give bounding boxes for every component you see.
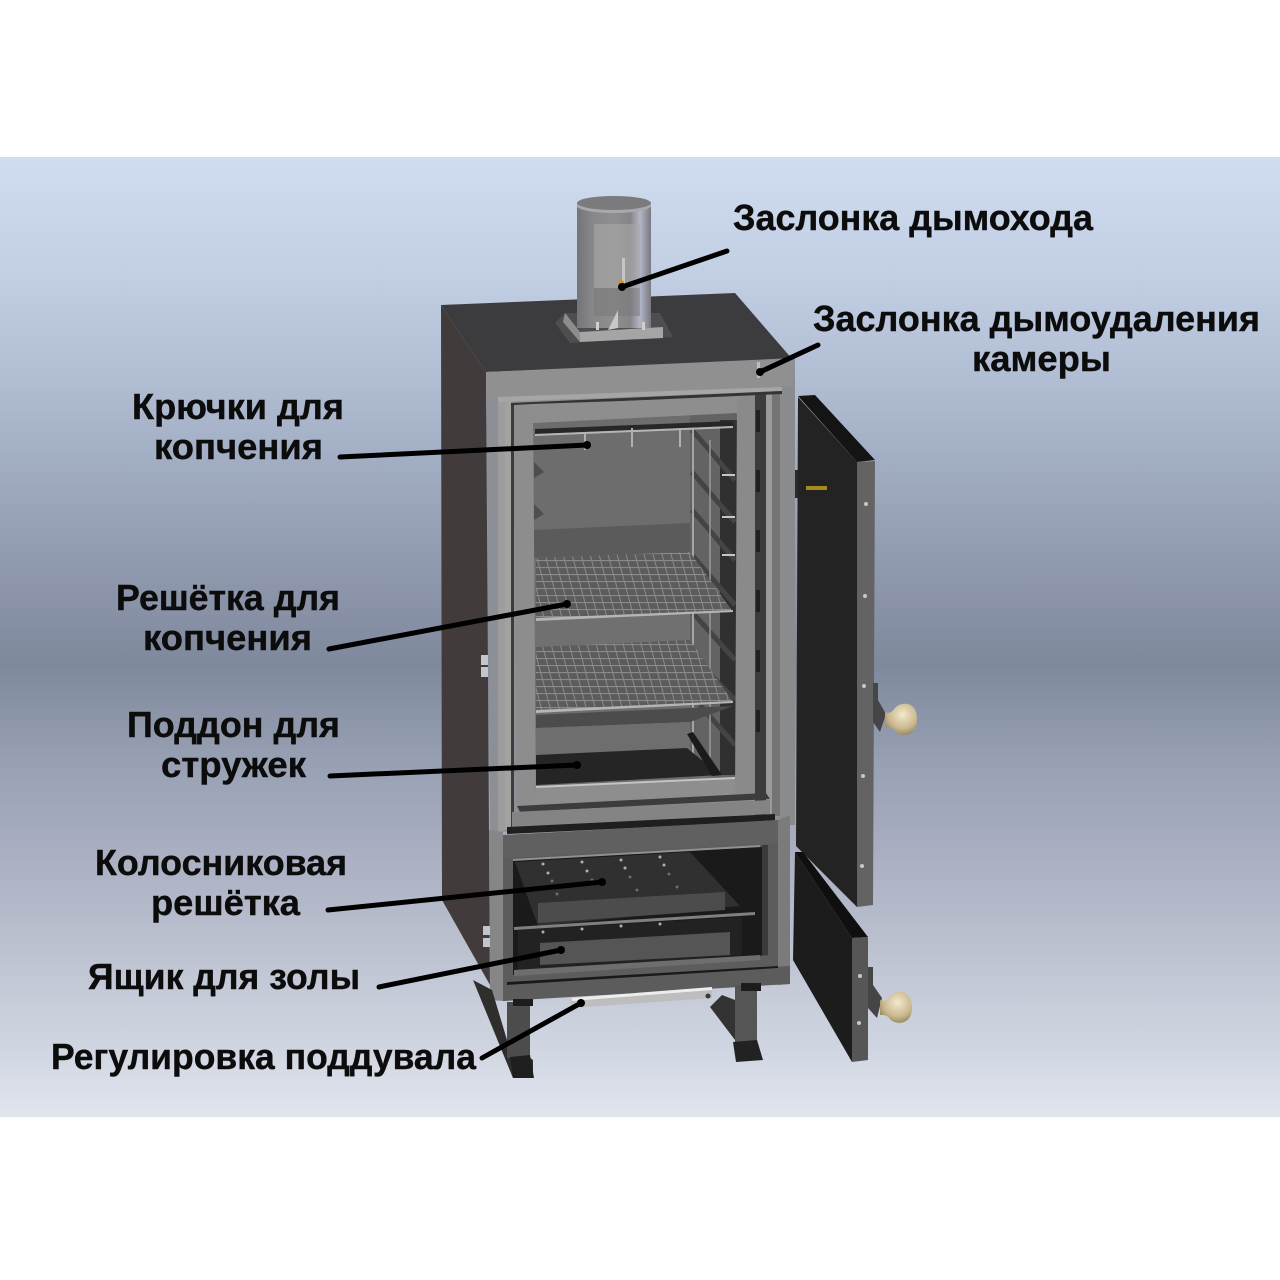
smoking grate lower bbox=[536, 640, 733, 713]
callout: smoking grate bbox=[116, 577, 571, 658]
lower firebox bbox=[489, 815, 790, 1001]
callout: smoking hooks: копчения bbox=[154, 426, 323, 467]
callout: blower adjustment bbox=[51, 999, 585, 1077]
chimney flange bbox=[555, 313, 673, 343]
ash box bbox=[514, 917, 760, 976]
chimney bbox=[577, 196, 651, 330]
callout: chimney damper: Заслонка дымохода bbox=[733, 197, 1094, 238]
side rack rails bbox=[692, 425, 735, 775]
background panel bbox=[0, 157, 1280, 1117]
inner door frame bars bbox=[507, 396, 775, 834]
upper open door bbox=[795, 395, 917, 907]
callout: fire grate: решётка bbox=[151, 882, 301, 923]
smoking hooks bar bbox=[535, 421, 733, 450]
legs and base bbox=[473, 980, 763, 1078]
door knob bbox=[880, 992, 912, 1023]
smoking grate upper bbox=[536, 552, 733, 621]
callout: fire grate bbox=[95, 842, 606, 923]
callout: smoking hooks: Крючки для bbox=[132, 386, 344, 427]
callout: blower adjustment: Регулировка поддувала bbox=[51, 1036, 477, 1077]
callout: fire grate: Колосниковая bbox=[95, 842, 347, 883]
door knob bbox=[885, 704, 917, 735]
callout: chimney damper bbox=[618, 197, 1094, 291]
callout: chamber smoke damper: Заслонка дымоудаления bbox=[813, 298, 1260, 339]
callout: chamber smoke damper: камеры bbox=[972, 338, 1111, 379]
callout: chip tray: стружек bbox=[161, 744, 307, 785]
upper front frame bbox=[486, 358, 795, 832]
chip tray bbox=[536, 706, 735, 806]
blower damper bar bbox=[570, 987, 712, 1008]
smoker cabinet bbox=[441, 196, 795, 1078]
callout: chamber smoke damper bbox=[756, 298, 1260, 379]
lower open door bbox=[793, 852, 912, 1062]
side latches bbox=[481, 655, 490, 947]
cabinet left side bbox=[441, 305, 490, 985]
callout: ash box: Ящик для золы bbox=[88, 956, 360, 997]
fire grate bbox=[514, 852, 755, 930]
callout: ash box bbox=[88, 946, 565, 997]
left shelf supports bbox=[534, 462, 544, 520]
callout: smoking grate: Решётка для bbox=[116, 577, 340, 618]
callout: smoking hooks bbox=[132, 386, 591, 467]
callout: smoking grate: копчения bbox=[143, 617, 312, 658]
chamber interior bbox=[533, 413, 737, 806]
callout: chip tray: Поддон для bbox=[127, 704, 340, 745]
cabinet top bbox=[441, 293, 793, 372]
callout: chip tray bbox=[127, 704, 581, 785]
